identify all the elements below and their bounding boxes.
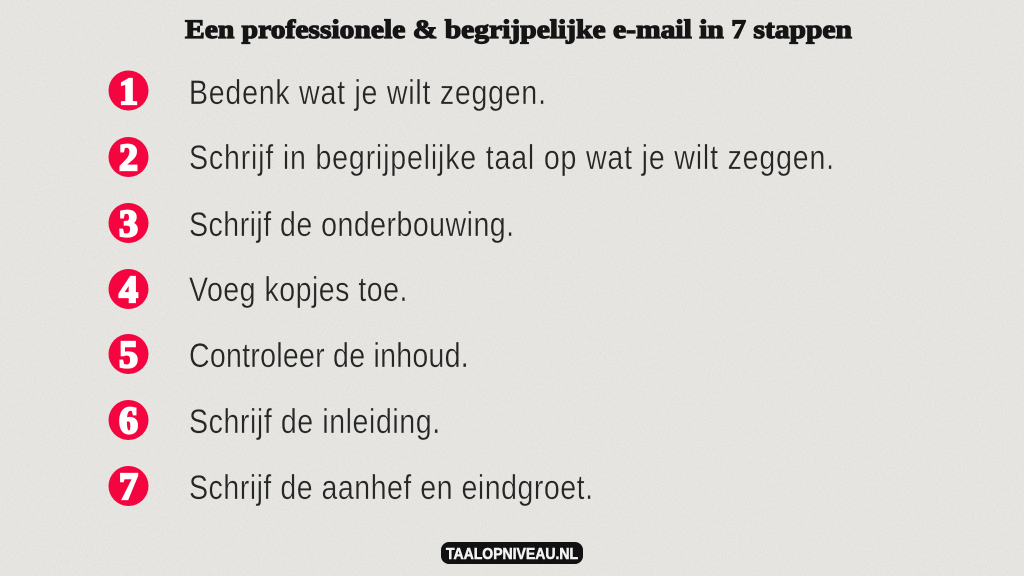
step 2 [108, 137, 834, 179]
icon: number 6: 6 [119, 400, 138, 442]
step 4 [108, 269, 407, 311]
step 1 text: Bedenk wat je wilt zeggen. [189, 74, 546, 112]
step 7 [108, 466, 593, 508]
icon: number 5: 5 [119, 334, 138, 376]
step 5 [108, 334, 469, 376]
icon: number 5 [108, 334, 148, 376]
step 3 text: Schrijf de onderbouwing. [189, 206, 514, 244]
icon: number 3: 3 [119, 203, 138, 245]
title: Een professionele & begrijpelijke e-mail in 7 stappen [185, 15, 853, 44]
icon: number 6 [108, 400, 148, 442]
icon: number 7 [108, 466, 148, 508]
icon: number 2 [108, 137, 148, 179]
step 3 [108, 203, 514, 245]
icon: number 1: 1 [119, 71, 138, 113]
step 6 text: Schrijf de inleiding. [189, 403, 440, 441]
icon: number 3 [108, 203, 148, 245]
step 5 text: Controleer de inhoud. [189, 337, 469, 375]
icon: number 4: 4 [119, 269, 138, 311]
footer badge: TAALOPNIVEAU.NL [446, 546, 578, 563]
footer badge [441, 542, 583, 564]
step 6 [108, 400, 440, 442]
step 2 text: Schrijf in begrijpelijke taal op wat je wilt zeggen. [189, 139, 834, 177]
icon: number 2: 2 [119, 137, 138, 179]
step 1 [108, 70, 546, 113]
icon: number 1 [108, 70, 148, 113]
icon: number 7: 7 [119, 466, 138, 508]
step 4 text: Voeg kopjes toe. [189, 271, 407, 309]
step 7 text: Schrijf de aanhef en eindgroet. [189, 469, 593, 507]
icon: number 4 [108, 269, 148, 311]
